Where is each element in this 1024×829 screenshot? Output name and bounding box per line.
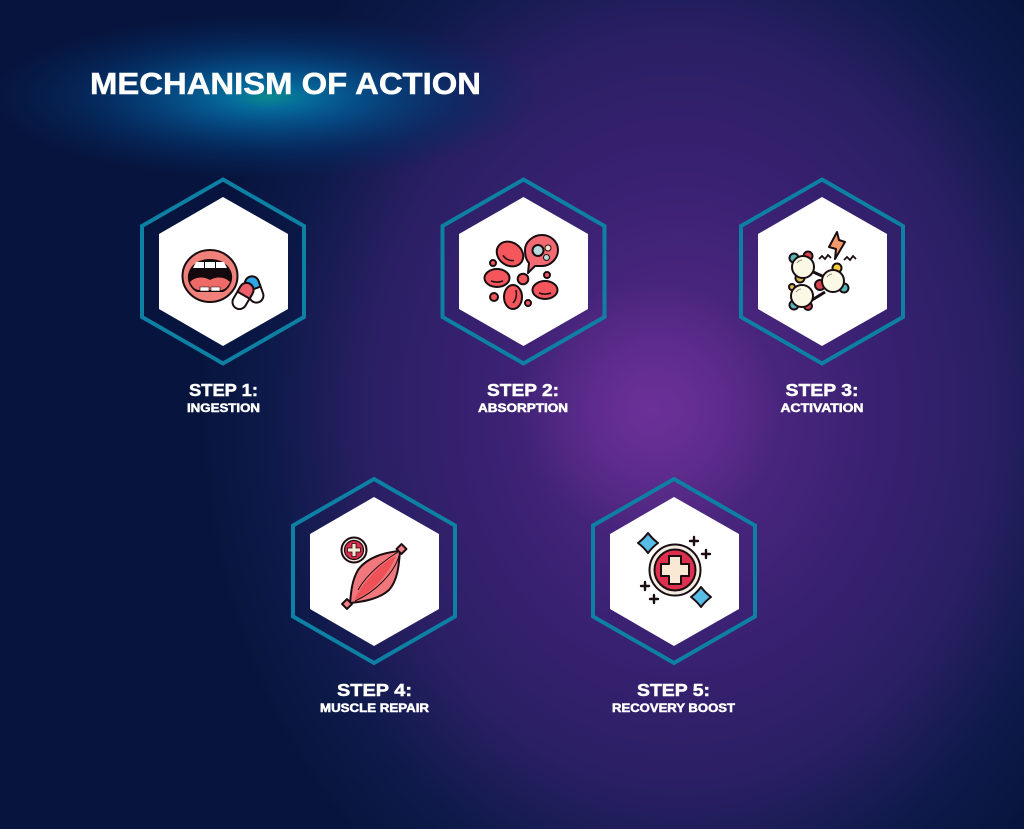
step 2 label (478, 380, 568, 415)
icon: medical cross with sparkles (638, 533, 711, 607)
title glow (0, 0, 560, 190)
step 2 label: STEP 2: (487, 380, 559, 400)
step 1 panel (142, 180, 304, 415)
hexagon card: step 4 (310, 497, 439, 646)
step 5 label: STEP 5: (637, 680, 710, 700)
step 4 label: MUSCLE REPAIR (320, 703, 430, 715)
hexagon card: step 3 (758, 197, 887, 346)
icon: molecule with lightning (789, 232, 856, 310)
hexagon frame: step 5 (593, 479, 755, 663)
step 4 label (320, 680, 430, 715)
step 5 panel (593, 479, 755, 715)
title: MECHANISM OF ACTION (90, 66, 481, 101)
hexagon frame: step 2 (442, 180, 604, 364)
step 5 label (612, 680, 735, 715)
hexagon card: step 5 (610, 497, 739, 646)
step 2 panel (442, 180, 604, 415)
hexagon frame: step 3 (741, 180, 903, 364)
step 3 panel (741, 180, 903, 415)
step 3 label (780, 380, 864, 415)
hexagon frame: step 4 (293, 479, 455, 663)
step 1 label (187, 380, 260, 415)
step 3 label: ACTIVATION (780, 403, 864, 415)
step 5 label: RECOVERY BOOST (612, 703, 735, 715)
step 4 label: STEP 4: (337, 680, 412, 700)
step 4 panel (293, 479, 455, 715)
hexagon card: step 1 (159, 197, 288, 346)
step 2 label: ABSORPTION (478, 403, 568, 415)
hexagon card: step 2 (459, 197, 588, 346)
icon: open mouth with capsules (182, 250, 265, 312)
hexagon frame: step 1 (142, 180, 304, 364)
step 1 label: INGESTION (187, 403, 260, 415)
icon: blood cells (484, 235, 558, 309)
step 3 label: STEP 3: (786, 380, 858, 400)
step 1 label: STEP 1: (189, 380, 258, 400)
icon: muscle with plus badge (342, 538, 406, 609)
